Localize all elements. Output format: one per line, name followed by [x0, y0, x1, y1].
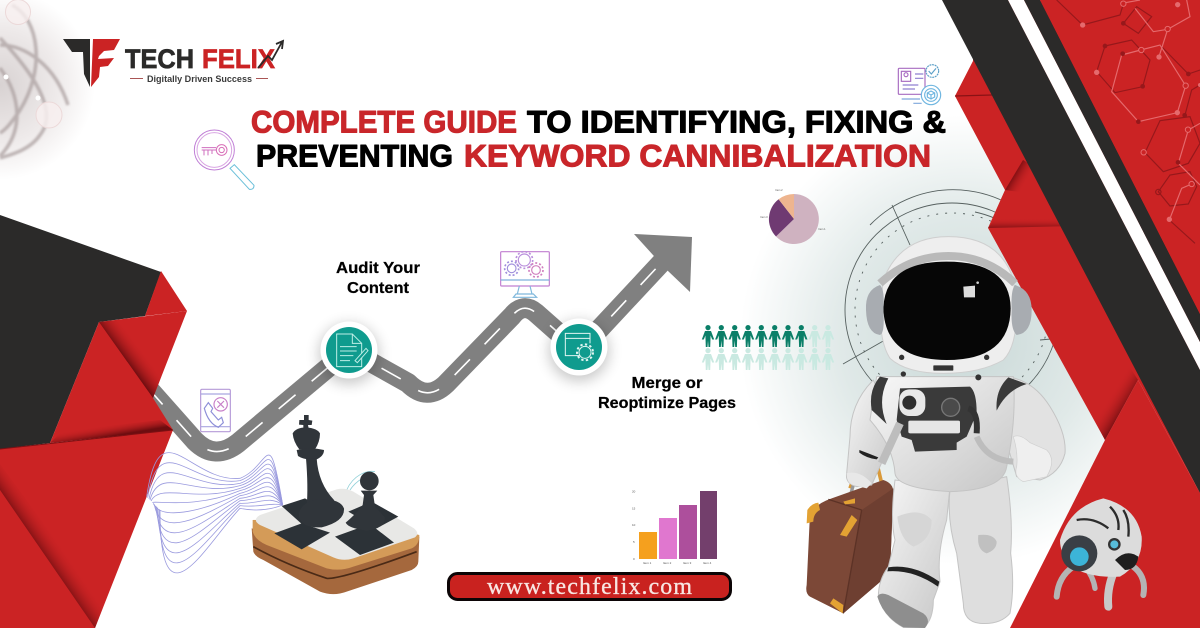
- board dark squares: [274, 498, 398, 555]
- red fold upper and middle: [50, 311, 187, 443]
- label: Merge or Reoptimize Pages: [598, 375, 736, 412]
- logo tagline: Digitally Driven Success: [147, 74, 252, 84]
- collar details: [933, 365, 953, 371]
- chart: bar chart: [632, 490, 717, 565]
- illustration: astronaut with suitcase: [806, 237, 1065, 628]
- node: merge icon: [549, 318, 609, 381]
- king: [293, 415, 344, 527]
- left arm: [846, 380, 893, 487]
- road dashes: [148, 262, 662, 452]
- logo: Tech Felix: [63, 39, 283, 87]
- air tubes: [882, 423, 900, 463]
- lower red triangle: [1010, 380, 1200, 628]
- icon: document with badges: [898, 65, 941, 105]
- row: highlighted people: [702, 325, 808, 347]
- website pill: www.techfelix.com: [487, 574, 692, 600]
- black diagonal band: [942, 0, 1200, 493]
- board top: [256, 489, 417, 560]
- chart: pie: [760, 188, 826, 244]
- chart: bar chart: 20: [632, 490, 636, 494]
- chart: people pictogram: [702, 325, 834, 370]
- panel: red and black folded shapes left: [0, 215, 187, 628]
- chart: pie: Item 1: [818, 227, 826, 231]
- torso: [870, 377, 1014, 492]
- logo wordmark: TECH: [125, 44, 194, 74]
- title: PREVENTING: [256, 138, 453, 174]
- label: Audit Your Content: Content: [347, 280, 410, 297]
- far leg: [949, 477, 1013, 624]
- helmet: [880, 237, 1017, 373]
- board base: [252, 528, 419, 594]
- chart: pie: Item 3: [760, 215, 768, 219]
- illustration: robot bug: [1057, 498, 1144, 607]
- pawn: [346, 472, 385, 531]
- right arm: [1000, 377, 1065, 480]
- robot face: [1061, 535, 1097, 571]
- white stripe: [1008, 0, 1200, 370]
- chart: bar chart: Item 4: [703, 561, 712, 565]
- row: muted people: [702, 325, 834, 370]
- decoration: wave mesh: [147, 453, 375, 573]
- board rim: [253, 517, 419, 570]
- label: Merge or Reoptimize Pages: Reoptimize Pages: [598, 395, 736, 412]
- title: TO IDENTIFYING, FIXING &: [527, 104, 946, 140]
- ear muffs: [866, 285, 884, 335]
- small red triangle: [145, 271, 187, 316]
- title: COMPLETE GUIDE: [251, 104, 517, 140]
- road arrow: [148, 234, 692, 452]
- illustration: chess board with king and pawn: [252, 415, 419, 594]
- red top right corner: [1040, 0, 1200, 314]
- visor: [883, 262, 1011, 360]
- chart: bar chart: Item 1: [643, 561, 652, 565]
- chart: pie: Item 2: [775, 188, 783, 192]
- chest panel: [897, 387, 977, 452]
- suitcase: [806, 469, 893, 613]
- title: KEYWORD CANNIBALIZATION: [464, 138, 931, 174]
- arrow head: [634, 234, 692, 292]
- near leg: [878, 480, 950, 628]
- chart: bar chart: 0: [633, 557, 635, 561]
- hexagon network: [1057, 0, 1200, 243]
- red shapes beside the band: [955, 0, 1200, 493]
- logo arrow: [258, 41, 283, 68]
- title: [251, 104, 946, 174]
- logo: Tech Felix: FELIX: [202, 44, 275, 74]
- chart: bar chart: Item 2: [663, 561, 672, 565]
- icon: phone with cross: [201, 389, 230, 432]
- chart: bar chart: Item 3: [683, 561, 692, 565]
- label: Audit Your Content: [336, 260, 420, 297]
- road surface: [148, 262, 662, 452]
- gloved hand with thumb: [1013, 436, 1052, 482]
- thin black stripe: [1024, 0, 1200, 342]
- node: audit icon: [319, 322, 379, 384]
- black angled shape: [0, 215, 161, 449]
- label: Merge or Reoptimize Pages: Merge or: [632, 375, 702, 392]
- chart: bar chart: 15: [632, 506, 636, 510]
- panel: red and black shapes right: [942, 0, 1200, 628]
- icon: monitor with gears: [501, 252, 549, 297]
- panel: hud rings behind astronaut: [843, 190, 1062, 417]
- robot shell: [1060, 498, 1142, 577]
- background glow behind astronaut: [740, 115, 1200, 565]
- logo mark: [63, 39, 120, 87]
- decoration: orbit graphic top left: [0, 0, 95, 180]
- label: Audit Your Content: Audit Your: [336, 260, 420, 277]
- robot legs: [1057, 567, 1144, 607]
- chart: bar chart: 10: [632, 523, 636, 527]
- shoulder pads: [871, 377, 888, 424]
- red fold large: [0, 430, 173, 628]
- chart: bar chart: 5: [633, 540, 635, 544]
- icon: key in magnifier: [194, 130, 254, 189]
